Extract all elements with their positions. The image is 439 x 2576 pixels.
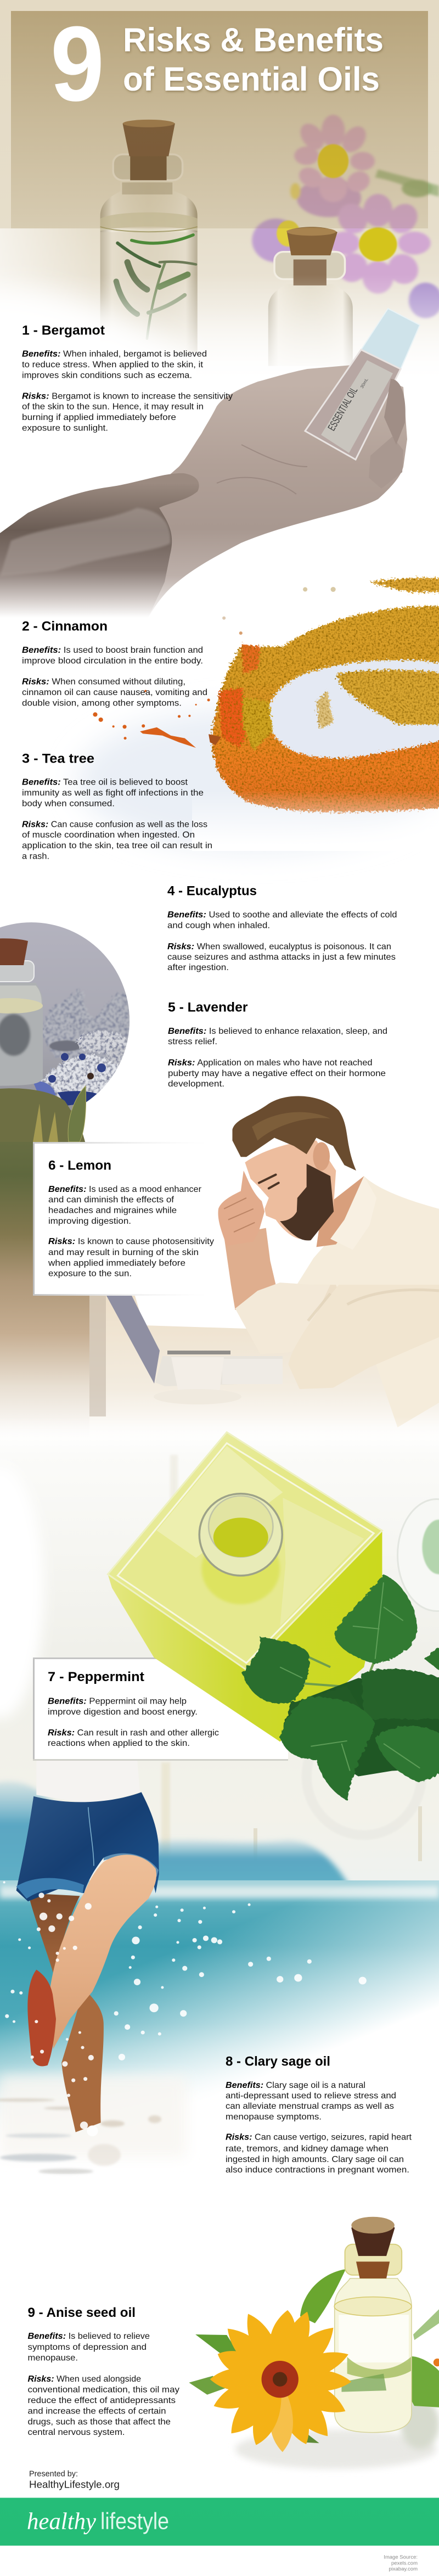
benefits text xyxy=(48,1697,198,1717)
benefits text: Benefits: Peppermint oil may help xyxy=(48,1697,187,1706)
illustration: flower and oil bottle xyxy=(189,2217,439,2469)
risks text: exposure to sunlight. xyxy=(22,424,108,433)
title xyxy=(50,4,384,124)
section 4: eucalyptus xyxy=(167,884,397,972)
ear xyxy=(313,1142,330,1171)
benefits text xyxy=(27,2332,150,2363)
risks text: rate, tremors, and kidney damage when xyxy=(226,2144,389,2153)
benefits text: can alleviate menstrual cramps as well as xyxy=(226,2102,394,2111)
title panel overlay xyxy=(11,11,428,228)
risks text xyxy=(22,820,212,861)
risks text: double vision, among other symptoms. xyxy=(22,698,182,708)
background: white wood table xyxy=(0,1416,439,1894)
forearm xyxy=(224,1228,276,1310)
powder ring xyxy=(212,578,439,812)
icon: glass dish xyxy=(307,1499,439,1835)
oil bottle xyxy=(334,2217,412,2433)
lavender circle image xyxy=(0,922,130,1111)
heading: 8 - Clary sage oil xyxy=(226,2054,330,2069)
desk scene xyxy=(89,1285,439,1444)
marigold flower xyxy=(210,2308,352,2452)
risks text xyxy=(167,942,396,972)
presented by credit: Presented by: xyxy=(29,2469,78,2479)
risks text: cinnamon oil can cause nausea, vomiting and xyxy=(22,688,207,697)
icon: small cork bottle xyxy=(268,227,353,366)
face xyxy=(245,1140,336,1239)
neck xyxy=(317,1176,373,1247)
benefits text: Benefits: Is believed to enhance relaxation, sleep, and xyxy=(168,1027,387,1036)
risks text: Risks: Application on males who have not reached xyxy=(168,1059,373,1067)
image source credit xyxy=(384,2555,418,2572)
benefits text: Benefits: Is used to boost brain function and xyxy=(22,646,203,655)
section 5: lavender xyxy=(168,1000,387,1089)
benefits text: symptoms of depression and xyxy=(27,2343,147,2352)
title text: of Essential Oils xyxy=(123,60,380,98)
icon: roller bottle: ESSENTIAL OIL xyxy=(326,385,360,433)
surface shadow xyxy=(235,2430,437,2469)
benefits text: Benefits: Is believed to relieve xyxy=(27,2332,150,2341)
section 8: clary sage oil xyxy=(226,2054,412,2175)
risks text xyxy=(27,2375,179,2437)
heading: 2 - Cinnamon xyxy=(22,619,108,634)
risks text: Risks: Is known to cause photosensitivity xyxy=(48,1237,214,1246)
risks text: central nervous system. xyxy=(27,2428,125,2437)
risks text: when applied immediately before xyxy=(48,1259,185,1268)
sand foam xyxy=(0,2075,187,2158)
risks text: development. xyxy=(168,1079,224,1089)
benefits text: Benefits: Tea tree oil is believed to boost xyxy=(22,778,188,787)
section 9: anise seed oil xyxy=(27,2305,179,2437)
image source credit: pexels.com xyxy=(391,2560,418,2566)
title text xyxy=(123,21,384,98)
background: top bottles and flowers photo xyxy=(0,0,439,401)
risks text xyxy=(22,677,207,708)
hand on forehead xyxy=(218,1171,264,1246)
front leg xyxy=(50,1855,156,2049)
benefits text xyxy=(226,2081,396,2122)
section 1: bergamot xyxy=(22,323,233,433)
benefits text: headaches and migraines while xyxy=(48,1206,177,1216)
footer band with logo xyxy=(0,2498,439,2546)
illustration: hands holding essential oil bottle xyxy=(0,309,420,620)
distant hills xyxy=(0,1782,349,1889)
risks text: Risks: Can cause confusion as well as the loss xyxy=(22,820,207,829)
risks text xyxy=(22,391,233,433)
risks text: after ingestion. xyxy=(167,963,229,972)
icon: square oil bottle xyxy=(108,1432,382,1741)
benefits text: and cough when inhaled. xyxy=(167,921,270,930)
illustration: spice powder ring xyxy=(77,578,439,851)
benefits text: body when consumed. xyxy=(22,799,115,808)
leaves xyxy=(189,2269,439,2443)
shirt torso xyxy=(297,1176,439,1427)
benefits text xyxy=(22,646,203,665)
benefits text: menopause symptoms. xyxy=(226,2113,322,2122)
benefits text: Benefits: Clary sage oil is a natural xyxy=(226,2081,365,2090)
big number nine: 9 xyxy=(50,4,104,124)
section 7: peppermint xyxy=(48,1670,219,1748)
benefits text: improve digestion and boost energy. xyxy=(48,1707,198,1717)
section 3: tea tree xyxy=(22,751,212,861)
risks text: also induce contractions in pregnant women. xyxy=(226,2165,409,2175)
risks text xyxy=(168,1059,386,1089)
pale table surface xyxy=(77,708,439,851)
plant strip xyxy=(0,1088,110,1438)
risks text: Risks: Can cause vertigo, seizures, rapid heart xyxy=(226,2132,412,2142)
heading: 5 - Lavender xyxy=(168,1000,248,1015)
heading: 1 - Bergamot xyxy=(22,323,105,338)
risks text: burning if applied immediately before xyxy=(22,413,176,422)
benefits text xyxy=(22,350,207,380)
icon: holding hand xyxy=(88,365,407,618)
risks text xyxy=(48,1237,214,1279)
foot sole xyxy=(27,1970,56,2067)
laptop xyxy=(106,1296,283,1404)
benefits text xyxy=(48,1185,202,1226)
white shirt xyxy=(36,1760,140,1805)
icon: roller bottle xyxy=(305,309,420,460)
upper arm sleeve xyxy=(289,1285,439,1389)
risks text: Risks: Can result in rash and other allergic xyxy=(48,1728,219,1738)
risks text: conventional medication, this oil may xyxy=(27,2385,179,2395)
risks text: exposure to the sun. xyxy=(48,1269,132,1279)
risks text: Risks: When used alongside xyxy=(27,2375,141,2384)
icon: thumb and fingers xyxy=(369,436,403,489)
hair xyxy=(232,1096,356,1171)
benefits text: and can diminish the effects of xyxy=(48,1195,175,1205)
benefits text: immunity as well as fight off infections in the xyxy=(22,788,204,798)
logo: healthy lifestyle: lifestyle xyxy=(100,2508,169,2535)
heading: 4 - Eucalyptus xyxy=(167,884,257,899)
risks text: cause seizures and asthma attacks in just a few minutes xyxy=(167,953,396,962)
plant overlay and leaf xyxy=(0,1088,85,1142)
illustration: beach and sea xyxy=(0,1782,439,2256)
icon: pink and purple daisies xyxy=(252,115,439,318)
risks text: ingested in high amounts. Clary sage oil can xyxy=(226,2155,404,2164)
panel: 6 lemon background xyxy=(33,1142,236,1296)
benefits text: improving digestion. xyxy=(48,1217,131,1226)
risks text: of the skin to the sun. Hence, it may result in xyxy=(22,402,204,412)
heading: 3 - Tea tree xyxy=(22,751,94,766)
beard xyxy=(280,1164,334,1240)
heading: 6 - Lemon xyxy=(48,1158,111,1173)
benefits text: anti-depressant used to relieve stress and xyxy=(226,2091,396,2101)
risks text: reactions when applied to the skin. xyxy=(48,1739,190,1748)
benefits text: Benefits: Is used as a mood enhancer xyxy=(48,1185,202,1194)
image source credit: Image Source: xyxy=(384,2555,418,2561)
section 6: lemon xyxy=(48,1158,214,1279)
sea xyxy=(0,1880,439,2144)
benefits text: to reduce stress. When applied to the skin, it xyxy=(22,360,204,369)
shirt collar xyxy=(330,1176,376,1250)
risks text: puberty may have a negative effect on their hormone xyxy=(168,1069,386,1078)
benefits text: Benefits: When inhaled, bergamot is believed xyxy=(22,350,207,359)
benefits text: improves skin conditions such as eczema. xyxy=(22,371,192,380)
section: left image plant strip and laptop desk xyxy=(0,917,439,1444)
rolled sleeve xyxy=(235,1283,330,1354)
benefits text xyxy=(22,778,204,808)
bottle neck xyxy=(199,1494,282,1576)
icon: large cork bottle with sprig xyxy=(100,120,198,352)
icon: mint leaves xyxy=(242,1574,439,1800)
back leg upper xyxy=(28,1893,80,1978)
benefits text: Benefits: Used to soothe and alleviate the effects of cold xyxy=(167,910,397,920)
icon: pointing hand xyxy=(0,473,199,620)
illustration: glass dish and mint bottle xyxy=(108,1432,439,1835)
risks text: Risks: Bergamot is known to increase the sensitivity xyxy=(22,391,233,401)
water droplets xyxy=(3,1881,367,2136)
benefits text xyxy=(168,1027,387,1046)
heading: 7 - Peppermint xyxy=(48,1670,144,1684)
heading: 9 - Anise seed oil xyxy=(27,2305,136,2320)
benefits text: menopause. xyxy=(27,2353,78,2363)
risks text: and increase the effects of certain xyxy=(27,2406,166,2416)
benefits text: stress relief. xyxy=(168,1037,217,1046)
benefits text: improve blood circulation in the entire body. xyxy=(22,656,203,665)
icon: roller bottle: 30mL xyxy=(359,377,369,389)
scattered spice specks xyxy=(93,587,336,748)
risks text xyxy=(226,2132,412,2175)
bottle xyxy=(0,938,43,1086)
blurred flowers xyxy=(43,988,130,1062)
denim shorts xyxy=(16,1792,159,1901)
risks text: of muscle coordination when ingested. On xyxy=(22,831,195,840)
section 2: cinnamon xyxy=(22,619,207,708)
logo: healthy lifestyle: healthy xyxy=(27,2509,97,2535)
risks text: Risks: When swallowed, eucalyptus is poisonous. It can xyxy=(167,942,391,951)
presented by credit xyxy=(29,2469,120,2490)
risks text: a rash. xyxy=(22,852,49,861)
back leg lower xyxy=(61,1989,104,2132)
benefits text xyxy=(167,910,397,930)
panel: 7 peppermint background xyxy=(33,1657,288,1761)
bright wall behind laptop xyxy=(132,1285,247,1329)
illustration: woman splashing on the beach xyxy=(3,1760,367,2136)
risks text: application to the skin, tea tree oil can result in xyxy=(22,841,212,850)
risks text xyxy=(48,1728,219,1748)
image source credit: pixabay.com xyxy=(389,2566,418,2572)
presented by credit: HealthyLifestyle.org xyxy=(29,2479,120,2490)
title text: Risks & Benefits xyxy=(123,21,384,58)
risks text: and may result in burning of the skin xyxy=(48,1248,199,1257)
coffee cup xyxy=(171,1357,224,1392)
illustration: stressed man at laptop xyxy=(218,1096,439,1427)
risks text: Risks: When consumed without diluting, xyxy=(22,677,185,687)
logo: healthy lifestyle xyxy=(27,2508,169,2535)
risks text: reduce the effect of antidepressants xyxy=(27,2396,176,2405)
eyebrow and closed eye xyxy=(259,1175,279,1188)
risks text: drugs, such as those that affect the xyxy=(27,2417,171,2427)
